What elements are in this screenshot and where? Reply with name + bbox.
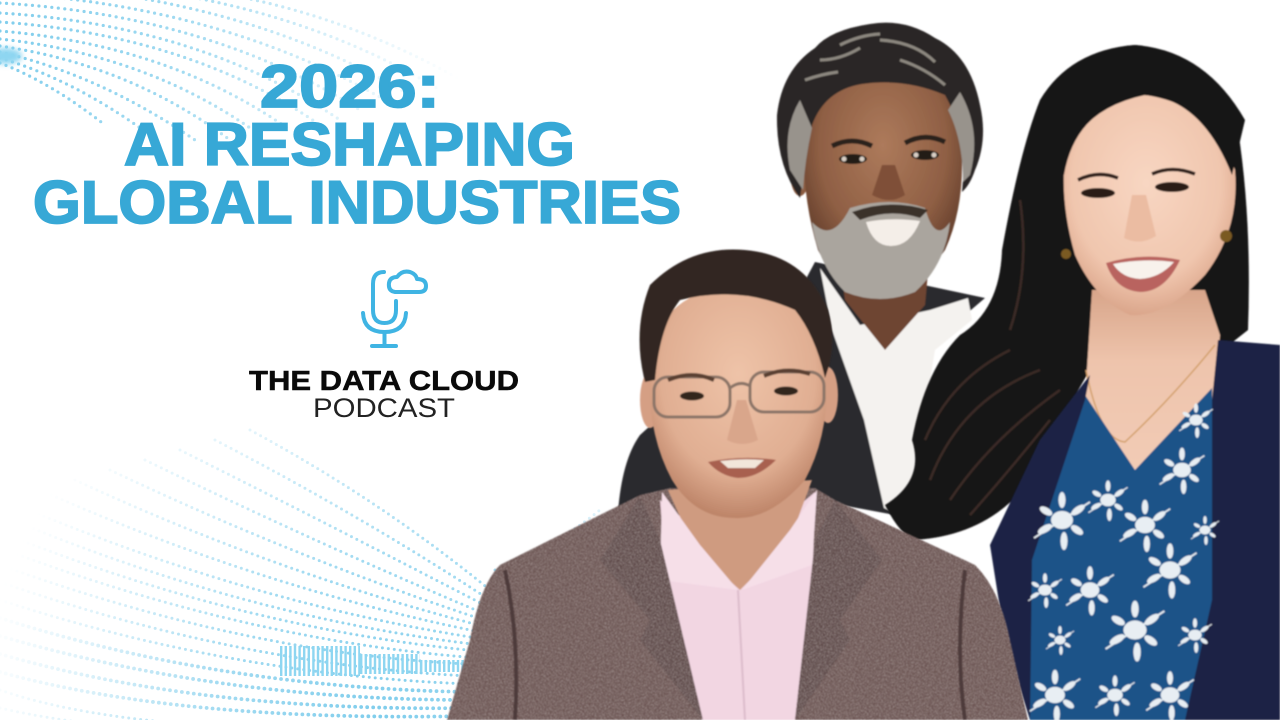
earrings (1061, 230, 1232, 259)
necklace (1086, 345, 1215, 442)
navy jacket right (1185, 340, 1280, 720)
face (804, 66, 962, 292)
brown blazer (447, 488, 1028, 720)
moustache (852, 204, 928, 220)
smile (866, 219, 920, 246)
shirt collar (660, 490, 817, 590)
long hair (885, 45, 1249, 540)
teeth (1113, 260, 1174, 279)
face (1064, 95, 1236, 315)
wordmark: PODCAST: PODCAST (313, 393, 455, 423)
beard (812, 202, 950, 299)
dark jacket (618, 262, 985, 515)
hair (640, 249, 832, 382)
white shirt (820, 268, 972, 520)
nose (1124, 195, 1156, 242)
wordmark: THE DATA CLOUD: THE DATA CLOUD (249, 365, 519, 396)
logo: The Data Cloud Podcast (249, 272, 519, 423)
ears (640, 372, 660, 428)
grey temples (788, 92, 974, 190)
brows (832, 137, 945, 146)
dotted wave pattern: bottom left (0, 430, 600, 720)
navy jacket left (990, 375, 1090, 720)
floral pattern (1028, 403, 1219, 720)
side hair over forehead (1045, 45, 1245, 175)
dense dot spot: top left (0, 48, 22, 64)
neck (668, 480, 812, 590)
neck (838, 250, 930, 350)
teeth (720, 459, 764, 468)
blue blouse (1028, 388, 1215, 720)
title (33, 53, 681, 236)
hair (777, 23, 983, 198)
smile (1106, 257, 1180, 292)
hair grey streaks (805, 34, 945, 85)
person: man in back (618, 23, 985, 520)
title line 2: AI RESHAPING (124, 111, 575, 178)
hair strands (925, 200, 1060, 515)
shirt placket (738, 590, 745, 720)
dotted wave pattern: top left (0, 0, 470, 140)
brows (1078, 170, 1195, 180)
person: man in front (447, 249, 1028, 720)
pink shirt (660, 492, 815, 720)
eyes (680, 386, 798, 400)
blazer shadows (505, 570, 965, 720)
left lapel (600, 496, 703, 720)
chest and neck (1085, 290, 1220, 470)
title line 3: GLOBAL INDUSTRIES (33, 169, 681, 236)
eyes (1081, 182, 1189, 198)
brows (668, 370, 810, 380)
nose (872, 165, 905, 200)
glasses (654, 372, 824, 417)
right lapel (795, 500, 882, 720)
mouth (708, 458, 776, 478)
nose (727, 400, 758, 444)
icon: microphone with cloud (363, 272, 426, 346)
title line 1: 2026: (260, 53, 440, 120)
eye whites (842, 152, 936, 162)
dense streak band (280, 661, 478, 666)
ear (790, 148, 810, 196)
face (649, 285, 827, 518)
person: woman on right (885, 45, 1280, 720)
eyes (839, 150, 939, 164)
